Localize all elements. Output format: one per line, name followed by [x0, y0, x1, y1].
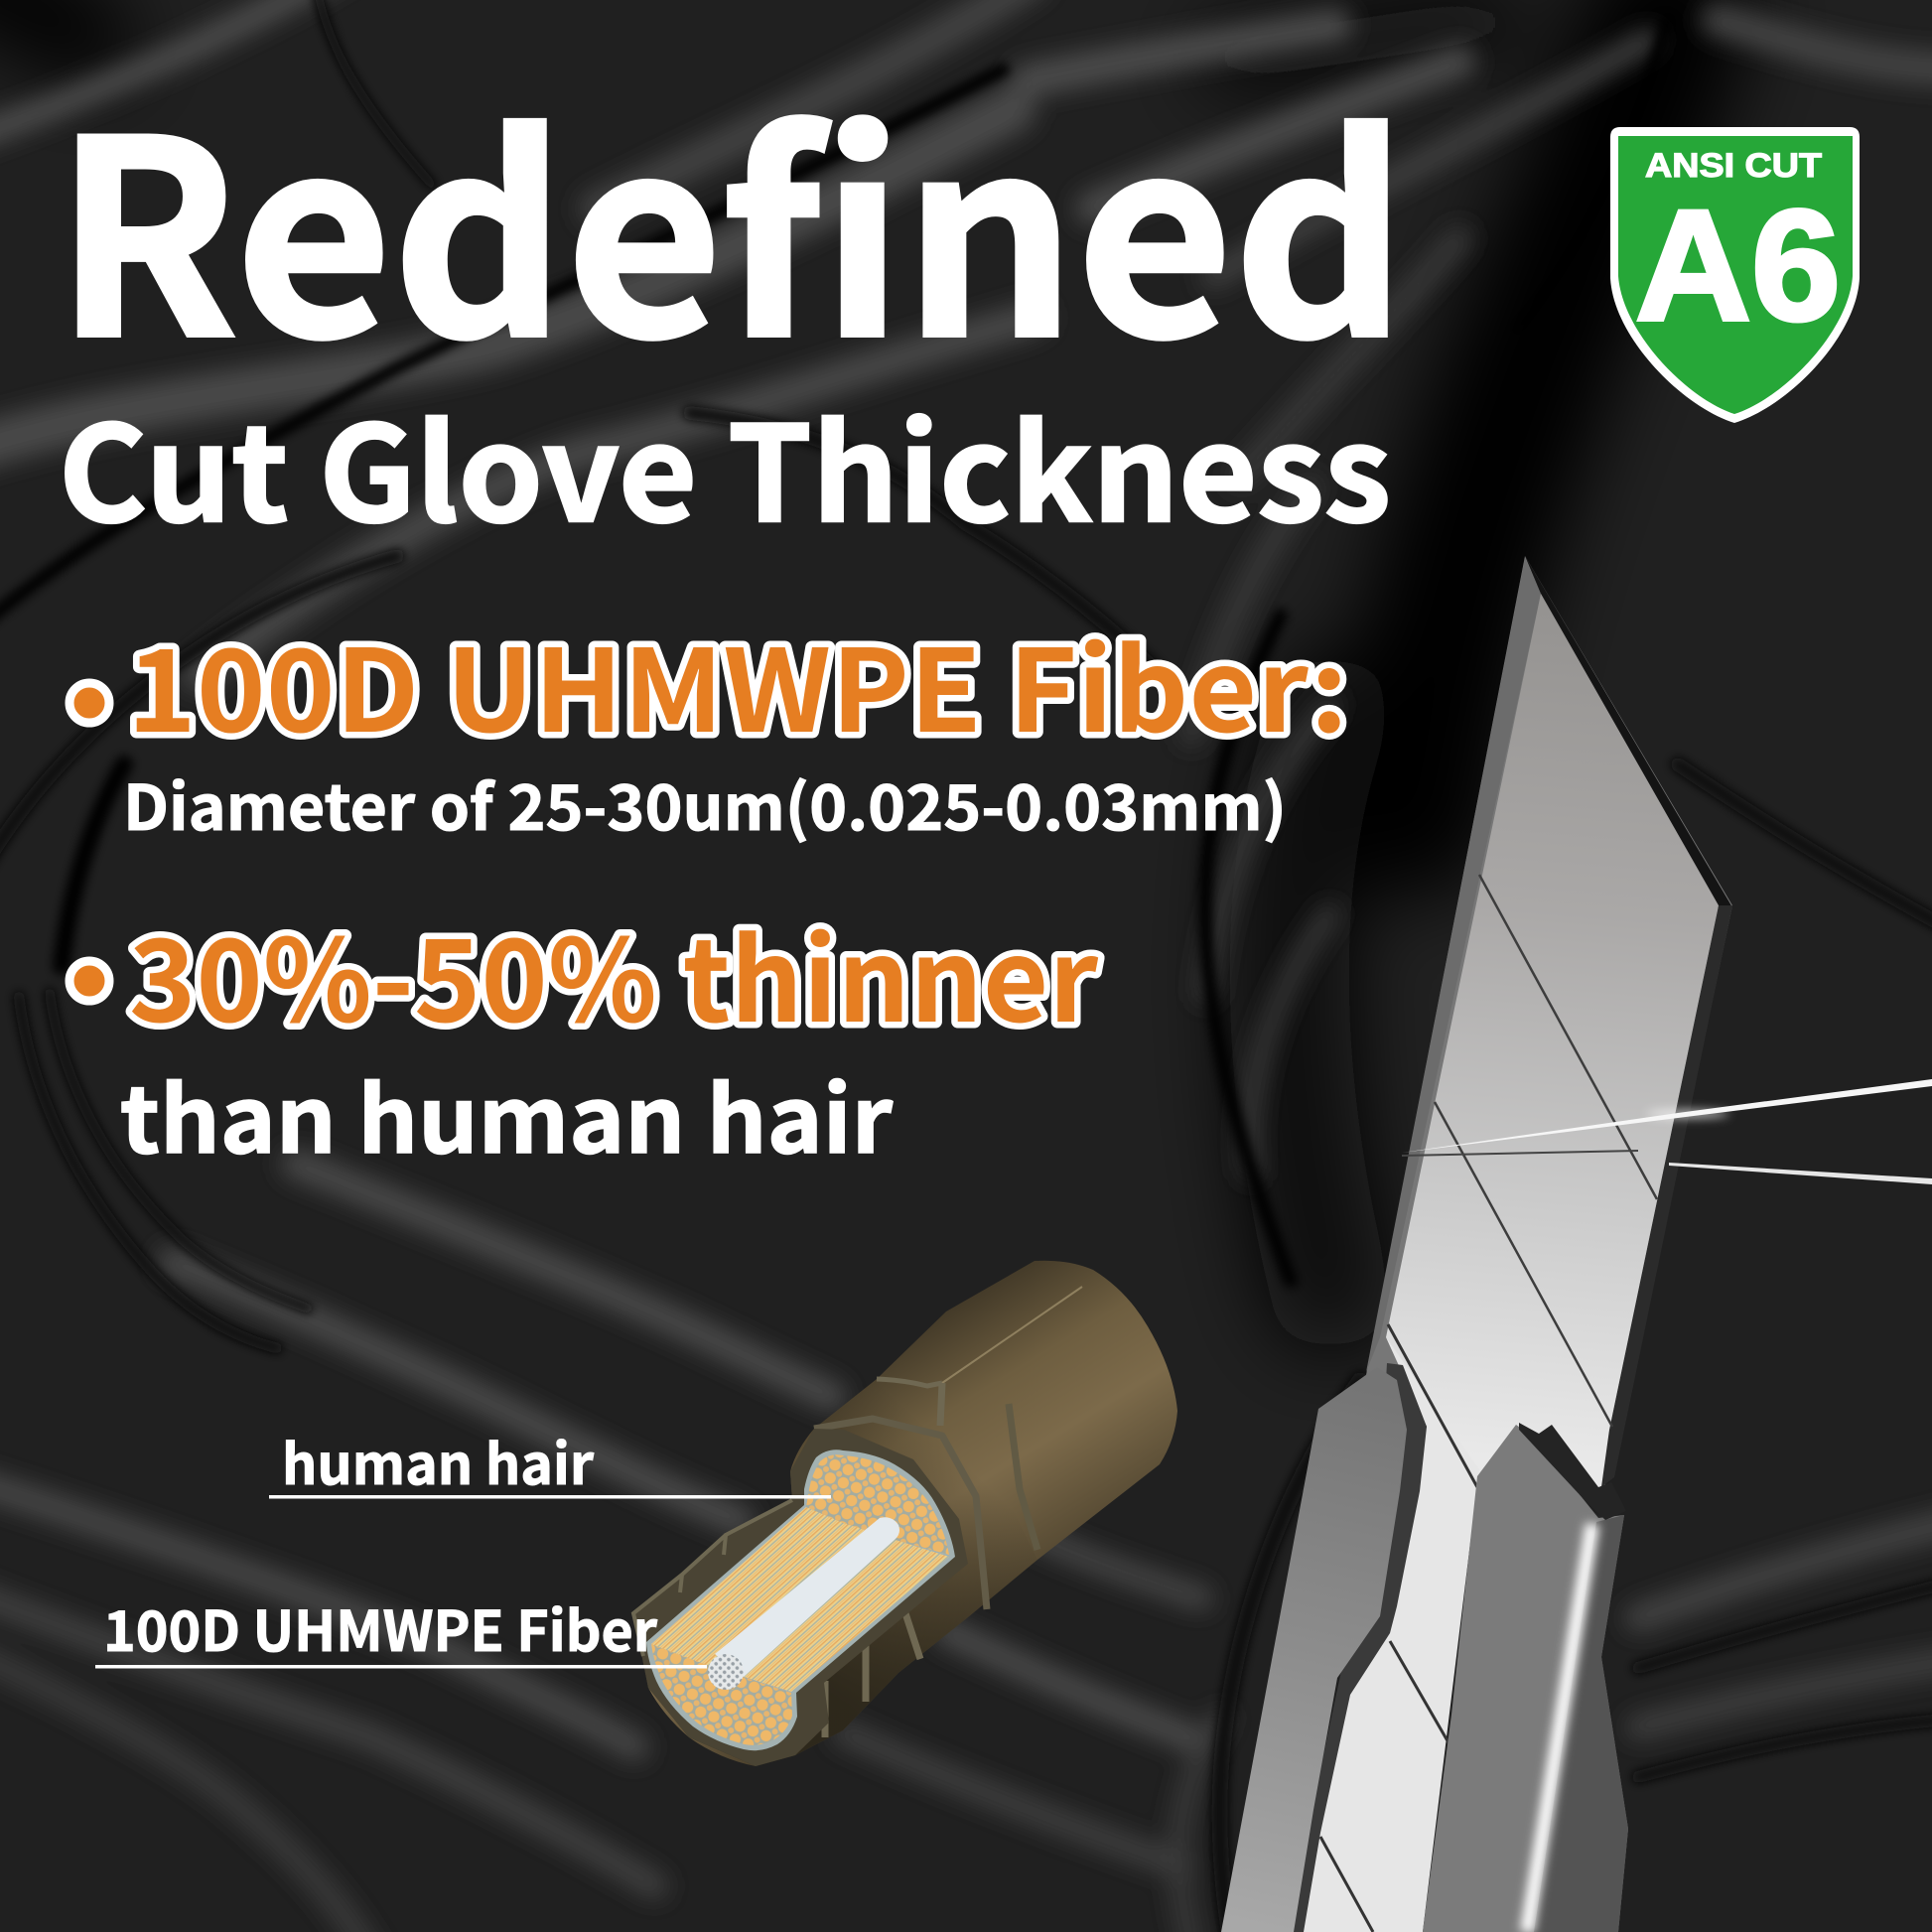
- illustration: knife with hair: [1221, 556, 1932, 1932]
- white core: [715, 1517, 899, 1677]
- illustration: human hair cross-section: [633, 1261, 1177, 1766]
- right grip: [1423, 1423, 1628, 1932]
- text: than human hair: than human hair: [120, 1047, 894, 1179]
- score lines: [1320, 1324, 1477, 1932]
- hair shading: [633, 1379, 1037, 1766]
- bullet 1: [69, 683, 109, 723]
- label: 100D UHMWPE Fiber: 100D UHMWPE Fiber: [103, 1587, 658, 1668]
- subtitle: Cut Glove Thickness: Cut Glove Thickness: [59, 369, 1391, 560]
- badge: ANSI CUT A6 shield: [1610, 127, 1860, 423]
- text: diameter: Diameter of 25-30um(0.025-0.03mm): [123, 759, 1287, 849]
- hair tube: [633, 1261, 1177, 1766]
- shell flakes: [633, 1500, 792, 1656]
- badge: ANSI CUT A6 shield: A6: [1635, 177, 1841, 353]
- title: Redefined: Redefined: [55, 23, 1407, 414]
- label: human hair: [269, 1421, 831, 1501]
- hair strands: [1402, 1079, 1932, 1184]
- bullet 2: [69, 961, 109, 1001]
- left grip: [1221, 1363, 1427, 1932]
- blade lower window: [1291, 1337, 1479, 1932]
- fibre section: [651, 1507, 949, 1692]
- heading: 30%-50% thinner: 30%-50% thinner: [129, 891, 1099, 1055]
- section lobes: [651, 1454, 949, 1745]
- label: human hair: human hair: [282, 1421, 595, 1501]
- badge: ANSI CUT A6 shield: ANSI CUT: [1645, 147, 1822, 185]
- hair cuticle bands: [814, 1287, 1082, 1737]
- section rim: [646, 1449, 955, 1750]
- heading: 100D UHMWPE Fiber: 100D UHMWPE Fiber:: [127, 601, 1348, 765]
- section shell: [633, 1429, 968, 1766]
- blade: [1366, 556, 1732, 1499]
- core mesh end: [708, 1654, 744, 1690]
